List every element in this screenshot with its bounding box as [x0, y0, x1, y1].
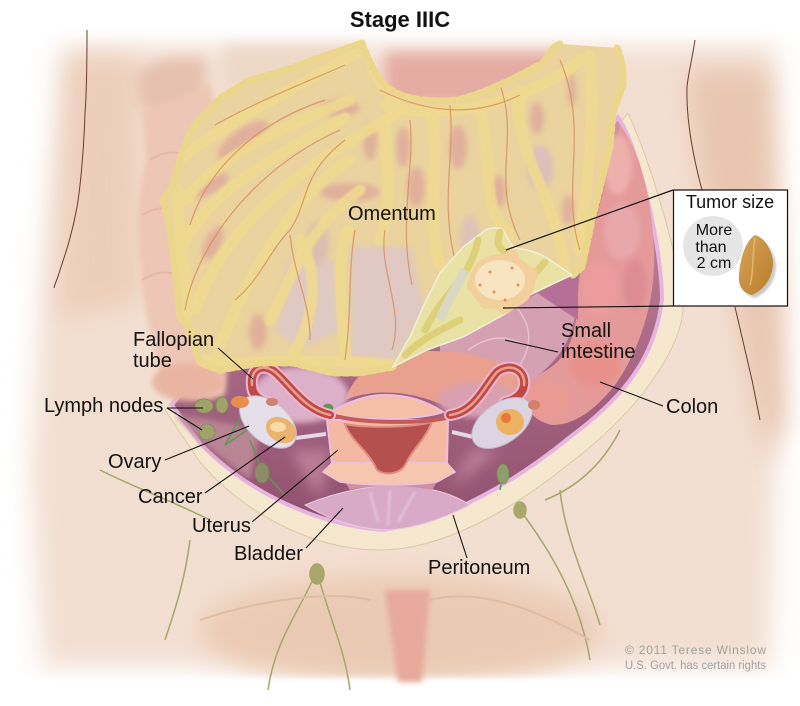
tumor size box: than — [695, 239, 727, 256]
uterus — [323, 395, 455, 490]
label leader lines — [165, 340, 663, 558]
descending colon — [524, 125, 654, 425]
tumor size leader lines — [503, 190, 673, 308]
small intestine — [440, 276, 578, 383]
label: small intestine: intestine — [561, 341, 636, 363]
vagina — [385, 590, 430, 682]
lymph nodes — [195, 397, 509, 484]
green lymph vessels in cavity — [225, 400, 503, 495]
copyright: © 2011 Terese Winslow — [625, 643, 766, 657]
rights notice: U.S. Govt. has certain rights — [625, 660, 766, 672]
abdominal cavity — [172, 117, 662, 530]
label: peritoneum: Peritoneum — [428, 557, 530, 579]
omentum pale interior — [275, 247, 425, 360]
label: omentum: Omentum — [348, 203, 436, 225]
omentum fat bands — [175, 45, 592, 365]
title: Stage IIIC — [350, 7, 450, 32]
label: cancer: Cancer — [138, 486, 203, 508]
omentum scalloped rim — [163, 43, 623, 373]
ovary right with cancer — [452, 387, 541, 459]
icon: peanut — [739, 235, 776, 298]
pelvic lavender lining — [175, 367, 518, 500]
tumor size box — [674, 190, 788, 306]
salmon bowel behind uterus — [345, 350, 530, 415]
label: fallopian tube: tube — [133, 350, 172, 372]
label: lymph nodes: Lymph nodes — [44, 395, 163, 417]
tumor size box: 2 cm — [697, 255, 731, 272]
omentum — [163, 43, 623, 373]
tumor — [467, 250, 538, 314]
label: colon: Colon — [666, 396, 718, 418]
omentum pink streaks — [190, 73, 576, 350]
pelvis lymph vessels and nodes — [100, 430, 620, 690]
label: fallopian tube: Fallopian — [133, 329, 214, 351]
fallopian tubes — [252, 368, 524, 415]
ovary left with cancer — [230, 385, 326, 459]
tumor size box: Tumor size — [686, 192, 774, 212]
label: ovary: Ovary — [108, 451, 161, 473]
tumor size box: More — [696, 222, 732, 239]
ascending colon — [138, 85, 235, 401]
peritoneum outer band — [165, 113, 683, 550]
omentum flap with tumor — [393, 228, 572, 367]
label: uterus: Uterus — [192, 515, 251, 537]
flank contour lines — [54, 30, 760, 420]
omentum vessels — [185, 60, 580, 360]
label: small intestine: Small — [561, 320, 611, 342]
bladder — [305, 486, 470, 530]
label: bladder: Bladder — [234, 543, 303, 565]
